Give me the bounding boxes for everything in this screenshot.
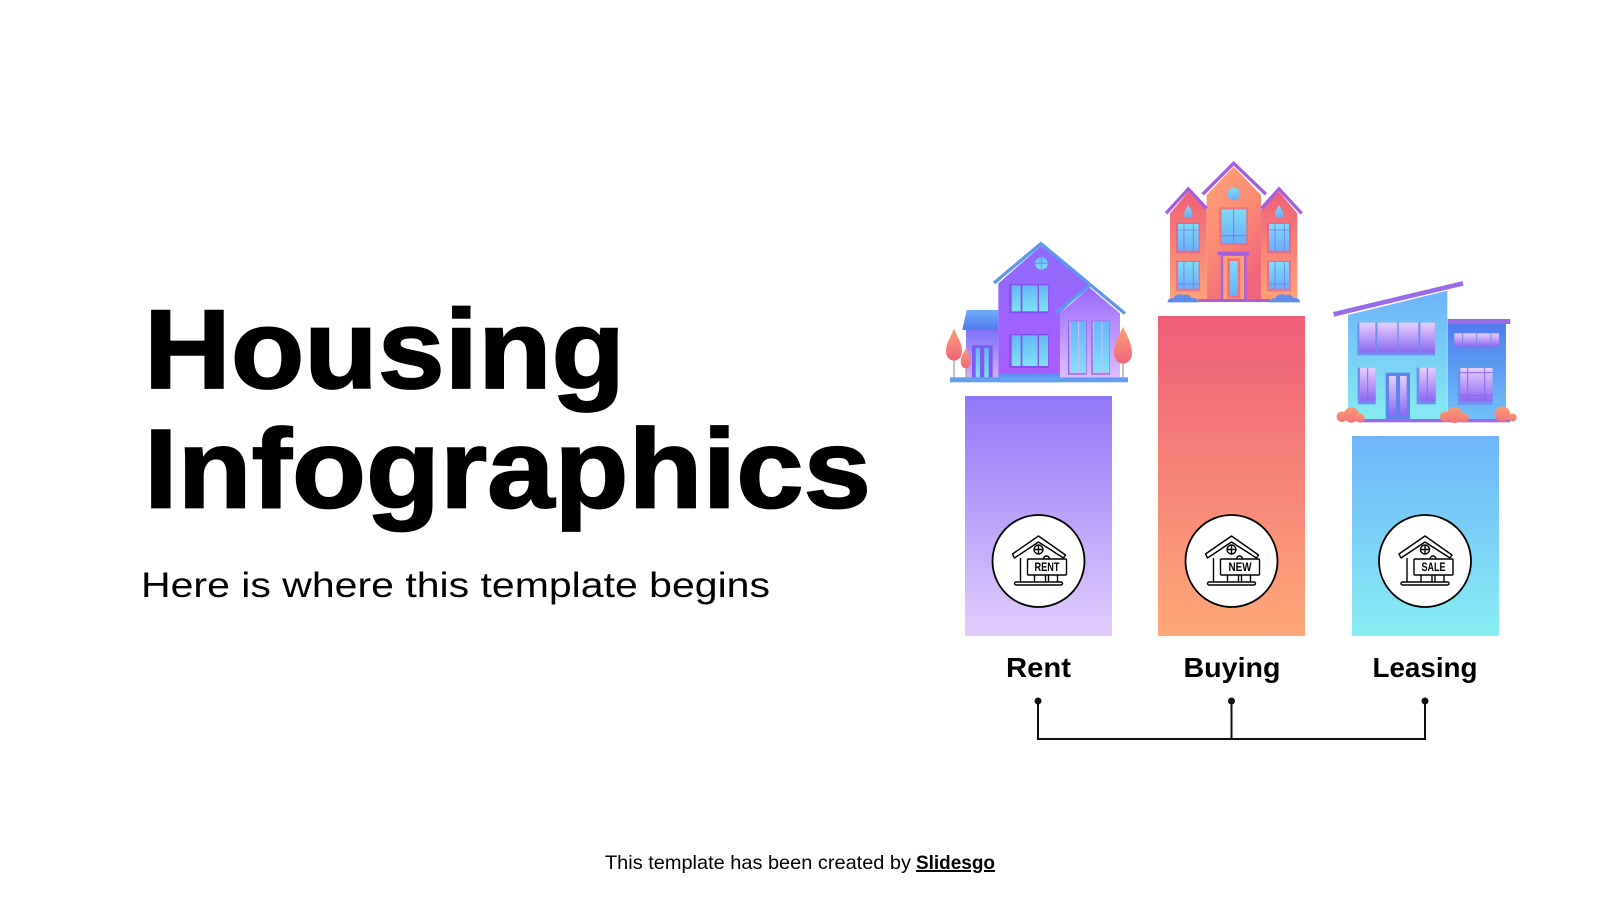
label: rent: Rent xyxy=(1006,652,1071,683)
side wings xyxy=(1170,192,1297,300)
bar: buying xyxy=(1158,316,1305,636)
icon: sale house sign xyxy=(1379,515,1471,607)
side windows xyxy=(1454,333,1499,405)
roofs xyxy=(1166,163,1302,213)
roofs xyxy=(994,244,1125,314)
round window xyxy=(1227,188,1240,200)
center body xyxy=(1207,167,1261,300)
illustration: blue house xyxy=(1334,283,1517,423)
round window xyxy=(1035,257,1048,270)
base and bushes xyxy=(1168,294,1300,302)
illustration: red house xyxy=(1166,163,1302,302)
panel: rent column xyxy=(965,396,1112,683)
door xyxy=(1218,252,1249,300)
icon: rent house sign: RENT xyxy=(1034,562,1060,574)
base xyxy=(950,373,1128,382)
panel: buying column xyxy=(1158,316,1305,683)
panel: leasing column xyxy=(1352,436,1499,683)
title line: Infographics: Infographics xyxy=(144,406,871,532)
footer credit xyxy=(605,852,995,874)
lower windows xyxy=(1358,368,1436,404)
trees xyxy=(946,327,1132,378)
icon: new house sign: NEW xyxy=(1228,562,1252,574)
icon: new house sign xyxy=(1186,515,1278,607)
icon: rent house sign xyxy=(992,515,1084,607)
title line: Housing: Housing xyxy=(144,287,625,412)
windows xyxy=(1176,207,1291,291)
main body xyxy=(1348,291,1447,420)
label: leasing: Leasing xyxy=(1372,652,1478,683)
footer link: Slidesgo: Slidesgo xyxy=(916,852,995,874)
icon: sale house sign: SALE xyxy=(1422,562,1446,574)
main body xyxy=(998,246,1089,374)
subtitle: Here is where this template begins xyxy=(141,566,770,605)
upper windows xyxy=(1357,323,1435,355)
bushes xyxy=(1337,406,1517,423)
illustration: purple house xyxy=(946,244,1132,382)
side block xyxy=(1448,319,1510,420)
label: buying: Buying xyxy=(1184,652,1280,683)
title xyxy=(144,287,871,532)
door xyxy=(1386,373,1410,419)
main windows xyxy=(1009,284,1110,375)
bar: rent xyxy=(965,396,1112,636)
gable wing xyxy=(1060,287,1120,378)
annex xyxy=(962,310,998,378)
arch dormers xyxy=(1184,205,1283,217)
connector bracket xyxy=(1034,698,1428,739)
bar: leasing xyxy=(1352,436,1499,636)
base xyxy=(1360,419,1510,422)
slanted roof xyxy=(1334,283,1463,314)
footer text: This template has been created by xyxy=(605,852,911,874)
